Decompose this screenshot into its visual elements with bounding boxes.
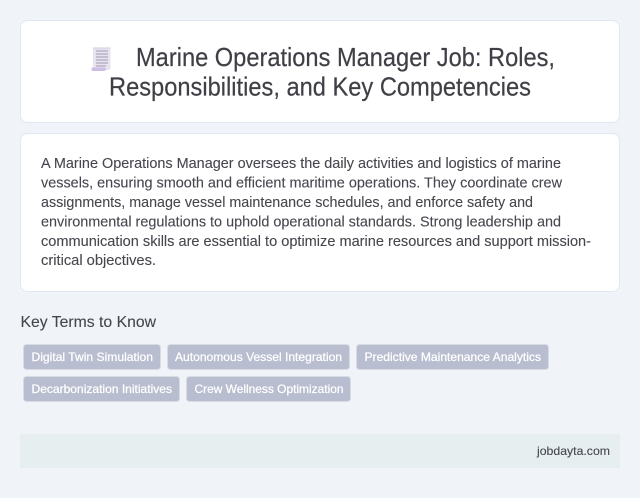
panel: description bbox=[20, 134, 620, 292]
tag: decarbonization initiatives: Decarbonization Initiatives bbox=[32, 382, 172, 396]
heading: key terms: Key Terms to Know bbox=[20, 314, 156, 331]
tag: digital twin simulation: Digital Twin Simulation bbox=[32, 350, 153, 364]
tag: crew wellness optimization bbox=[186, 376, 350, 402]
title line 1: Marine Operations Manager Job: Roles, bbox=[136, 44, 555, 72]
tag: predictive maintenance analytics: Predictive Maintenance Analytics bbox=[364, 350, 541, 364]
description text: A Marine Operations Manager oversees the daily activities and logistics of marine bbox=[41, 156, 561, 172]
footer site name: jobdayta.com bbox=[536, 444, 610, 458]
tag: autonomous vessel integration: Autonomous Vessel Integration bbox=[175, 350, 342, 364]
description text: assignments, manage vessel maintenance schedules, and enforce safety and bbox=[41, 195, 533, 211]
tag: crew wellness optimization: Crew Wellness Optimization bbox=[194, 382, 344, 396]
tag: digital twin simulation bbox=[24, 344, 160, 370]
tag list bbox=[24, 344, 548, 402]
panel: title card bbox=[20, 20, 620, 122]
footer bbox=[20, 434, 620, 468]
description text bbox=[41, 156, 591, 269]
icon: paper scroll bbox=[91, 48, 110, 71]
tag: predictive maintenance analytics bbox=[356, 344, 548, 370]
tag: autonomous vessel integration bbox=[168, 344, 350, 370]
description text: vessels, ensuring smooth and efficient maritime operations. They coordinate crew bbox=[41, 176, 563, 192]
description text: critical objectives. bbox=[41, 253, 156, 269]
title line 2: Responsibilities, and Key Competencies bbox=[109, 74, 531, 102]
description text: environmental regulations to uphold operational standards. Strong leadership and bbox=[41, 214, 561, 230]
description text: communication skills are essential to optimize marine resources and support mission- bbox=[41, 234, 591, 250]
tag: decarbonization initiatives bbox=[24, 376, 180, 402]
